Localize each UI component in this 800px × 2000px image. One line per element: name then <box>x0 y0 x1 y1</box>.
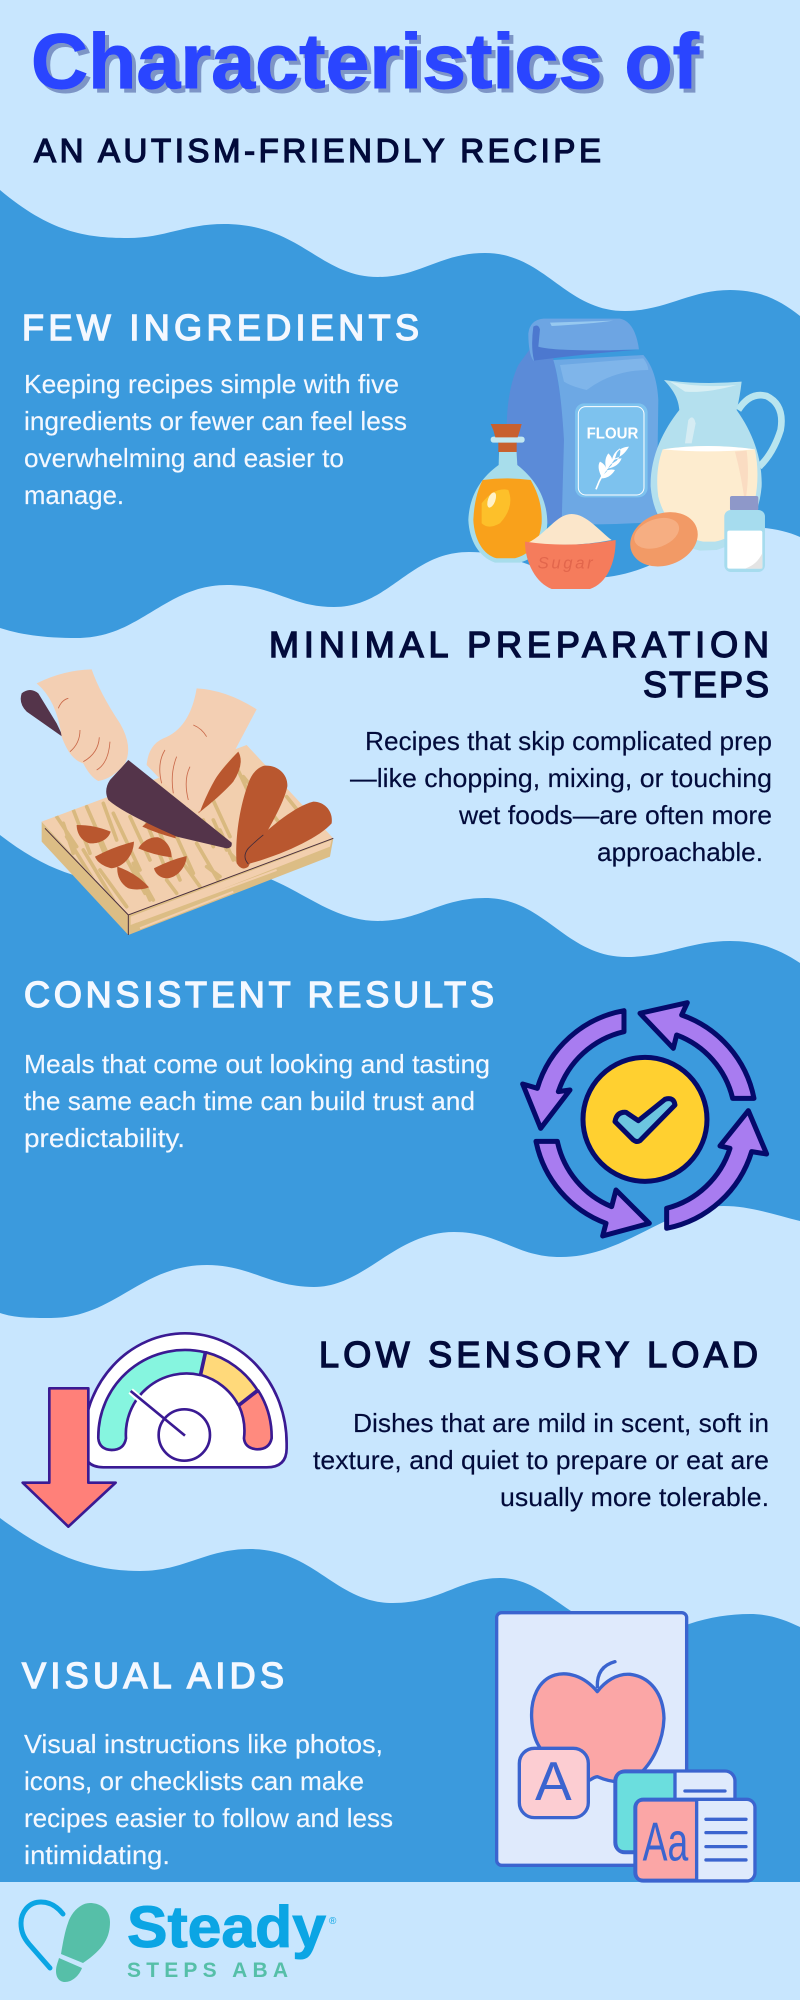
body: low sensory load: Dishes that are mild in scent, soft in <box>353 1408 769 1438</box>
subtitle: AN AUTISM-FRIENDLY RECIPE <box>34 132 601 169</box>
flour bag <box>507 319 658 525</box>
body: visual aids <box>24 1729 393 1870</box>
logo mark: heart and footprint <box>21 1902 110 1982</box>
oil bottle <box>468 424 547 563</box>
icon: baking ingredients <box>468 319 781 589</box>
letter card A <box>519 1748 588 1818</box>
icon: cycle arrows with check mark <box>523 1003 767 1236</box>
body: visual aids: icons, or checklists can make <box>24 1766 364 1796</box>
section: few ingredients text <box>22 307 419 510</box>
gauge <box>83 1333 287 1467</box>
body: minimal preparation: wet foods—are often more <box>458 800 772 830</box>
salt shaker <box>724 496 765 572</box>
front flash card <box>635 1799 755 1881</box>
body: low sensory load: usually more tolerable. <box>500 1482 769 1512</box>
hands <box>37 669 257 812</box>
carrot pieces <box>77 752 332 889</box>
wave band: consistent results <box>0 835 800 1318</box>
body: few ingredients <box>24 369 407 510</box>
body: consistent results: Meals that come out looking and tasting <box>24 1049 490 1079</box>
heading: minimal preparation: STEPS <box>643 664 769 705</box>
heading: low sensory load: LOW SENSORY LOAD <box>319 1334 758 1375</box>
wordmark: Steps ABA: STEPS ABA <box>127 1959 288 1982</box>
body: few ingredients: overwhelming and easier to <box>24 443 344 473</box>
check badge <box>583 1057 707 1181</box>
heading: minimal preparation: MINIMAL PREPARATION <box>269 624 769 665</box>
body: minimal preparation: approachable. <box>597 837 763 867</box>
section: consistent results text <box>24 974 494 1153</box>
wave band: few ingredients <box>0 190 800 638</box>
front flash card: Aa <box>643 1811 689 1873</box>
body: minimal preparation: Recipes that skip complicated prep <box>365 726 772 756</box>
flour bag: FLOUR <box>587 425 638 442</box>
icon: sensory gauge with down arrow <box>23 1333 287 1527</box>
wave band: visual aids <box>0 1518 800 1882</box>
section: visual aids text <box>22 1655 393 1870</box>
heading: few ingredients: FEW INGREDIENTS <box>22 307 419 348</box>
body: consistent results: predictability. <box>24 1123 185 1153</box>
body: visual aids: Visual instructions like photos, <box>24 1729 383 1759</box>
body: visual aids: intimidating. <box>24 1840 170 1870</box>
cutting board <box>42 745 333 935</box>
body: minimal preparation: —like chopping, mixing, or touching <box>350 763 772 793</box>
down arrow <box>23 1388 116 1527</box>
back flash card <box>615 1771 735 1853</box>
wordmark: Steady: Steady <box>127 1895 326 1960</box>
knife <box>21 690 232 848</box>
body: visual aids: recipes easier to follow and less <box>24 1803 393 1833</box>
section: low sensory load text <box>313 1334 769 1512</box>
body: few ingredients: Keeping recipes simple with five <box>24 369 399 399</box>
heading: minimal preparation <box>269 624 769 705</box>
body: consistent results: the same each time can build trust and <box>24 1086 475 1116</box>
body: few ingredients: manage. <box>24 480 124 510</box>
icon: hands chopping on cutting board <box>21 669 333 935</box>
body: low sensory load: texture, and quiet to prepare or eat are <box>313 1445 769 1475</box>
icon: picture card and flash cards <box>497 1613 755 1881</box>
section: minimal preparation text <box>269 624 772 867</box>
heading: consistent results: CONSISTENT RESULTS <box>24 974 494 1015</box>
body: few ingredients: ingredients or fewer can feel less <box>24 406 407 436</box>
egg <box>623 503 705 576</box>
picture card <box>497 1613 687 1865</box>
milk pitcher <box>651 380 781 551</box>
sugar bowl <box>525 514 616 589</box>
body: consistent results <box>24 1049 490 1153</box>
letter card A: A <box>535 1750 572 1812</box>
heading: visual aids: VISUAL AIDS <box>22 1655 284 1696</box>
registered mark: ® <box>329 1916 337 1927</box>
sugar bowl: Sugar <box>538 553 594 572</box>
title: Characteristics of <box>31 17 700 105</box>
body: minimal preparation <box>350 726 772 867</box>
apple <box>532 1662 664 1782</box>
cycle arrows <box>523 1003 767 1236</box>
body: low sensory load <box>313 1408 769 1512</box>
logo: Steady Steps ABA <box>21 1895 337 1982</box>
